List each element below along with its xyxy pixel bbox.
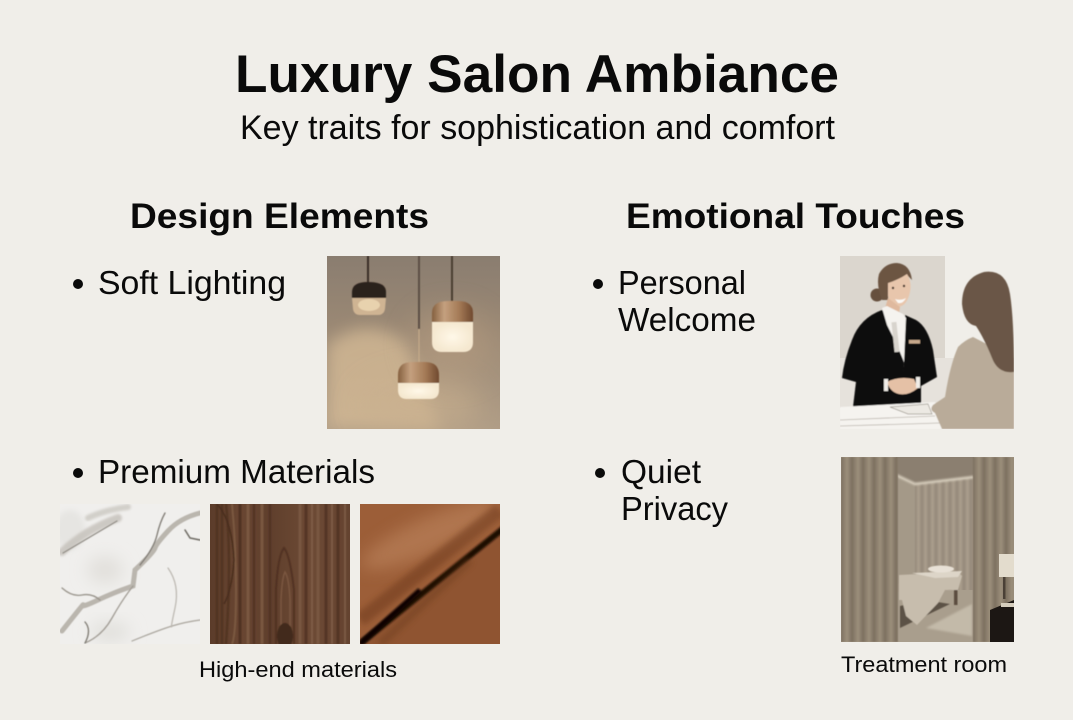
bullet: personal welcome: Personal — [618, 264, 746, 301]
guest — [931, 272, 1014, 429]
caption: treatment room: Treatment room — [841, 652, 1007, 677]
illustration: receptionist greeting guest — [840, 256, 1014, 429]
bullet: quiet privacy — [595, 453, 728, 527]
massage bed — [899, 566, 962, 628]
bullet: personal welcome — [593, 264, 756, 338]
bullet: soft lighting: Soft Lighting — [98, 264, 286, 301]
bedside table — [990, 600, 1014, 642]
counter — [840, 402, 936, 408]
bullet: personal welcome: Welcome — [618, 301, 756, 338]
bullet: quiet privacy: Quiet — [621, 453, 701, 490]
heading: design elements: Design Elements — [130, 197, 429, 236]
left curtain — [841, 457, 898, 642]
panel: design elements — [55, 197, 506, 682]
back curtain wall — [915, 477, 974, 595]
subtitle: Key traits for sophistication and comfort — [240, 109, 836, 147]
image: pendant lights — [327, 256, 500, 435]
image: treatment room — [841, 457, 1014, 642]
bullet: quiet privacy: Privacy — [621, 490, 728, 527]
swatch: marble — [55, 504, 200, 644]
bullet: premium materials: Premium Materials — [98, 453, 375, 490]
heading: emotional touches: Emotional Touches — [626, 197, 965, 236]
right curtain — [973, 457, 1014, 642]
swatch: leather — [360, 504, 500, 644]
title: Luxury Salon Ambiance — [235, 45, 839, 104]
floor — [942, 590, 972, 595]
lamp — [999, 554, 1014, 577]
caption: high-end materials: High-end materials — [199, 657, 397, 682]
receptionist — [842, 263, 937, 407]
swatch: wood — [210, 504, 350, 649]
ceiling — [896, 457, 974, 484]
panel: emotional touches — [593, 197, 1014, 677]
side wall — [896, 475, 915, 585]
